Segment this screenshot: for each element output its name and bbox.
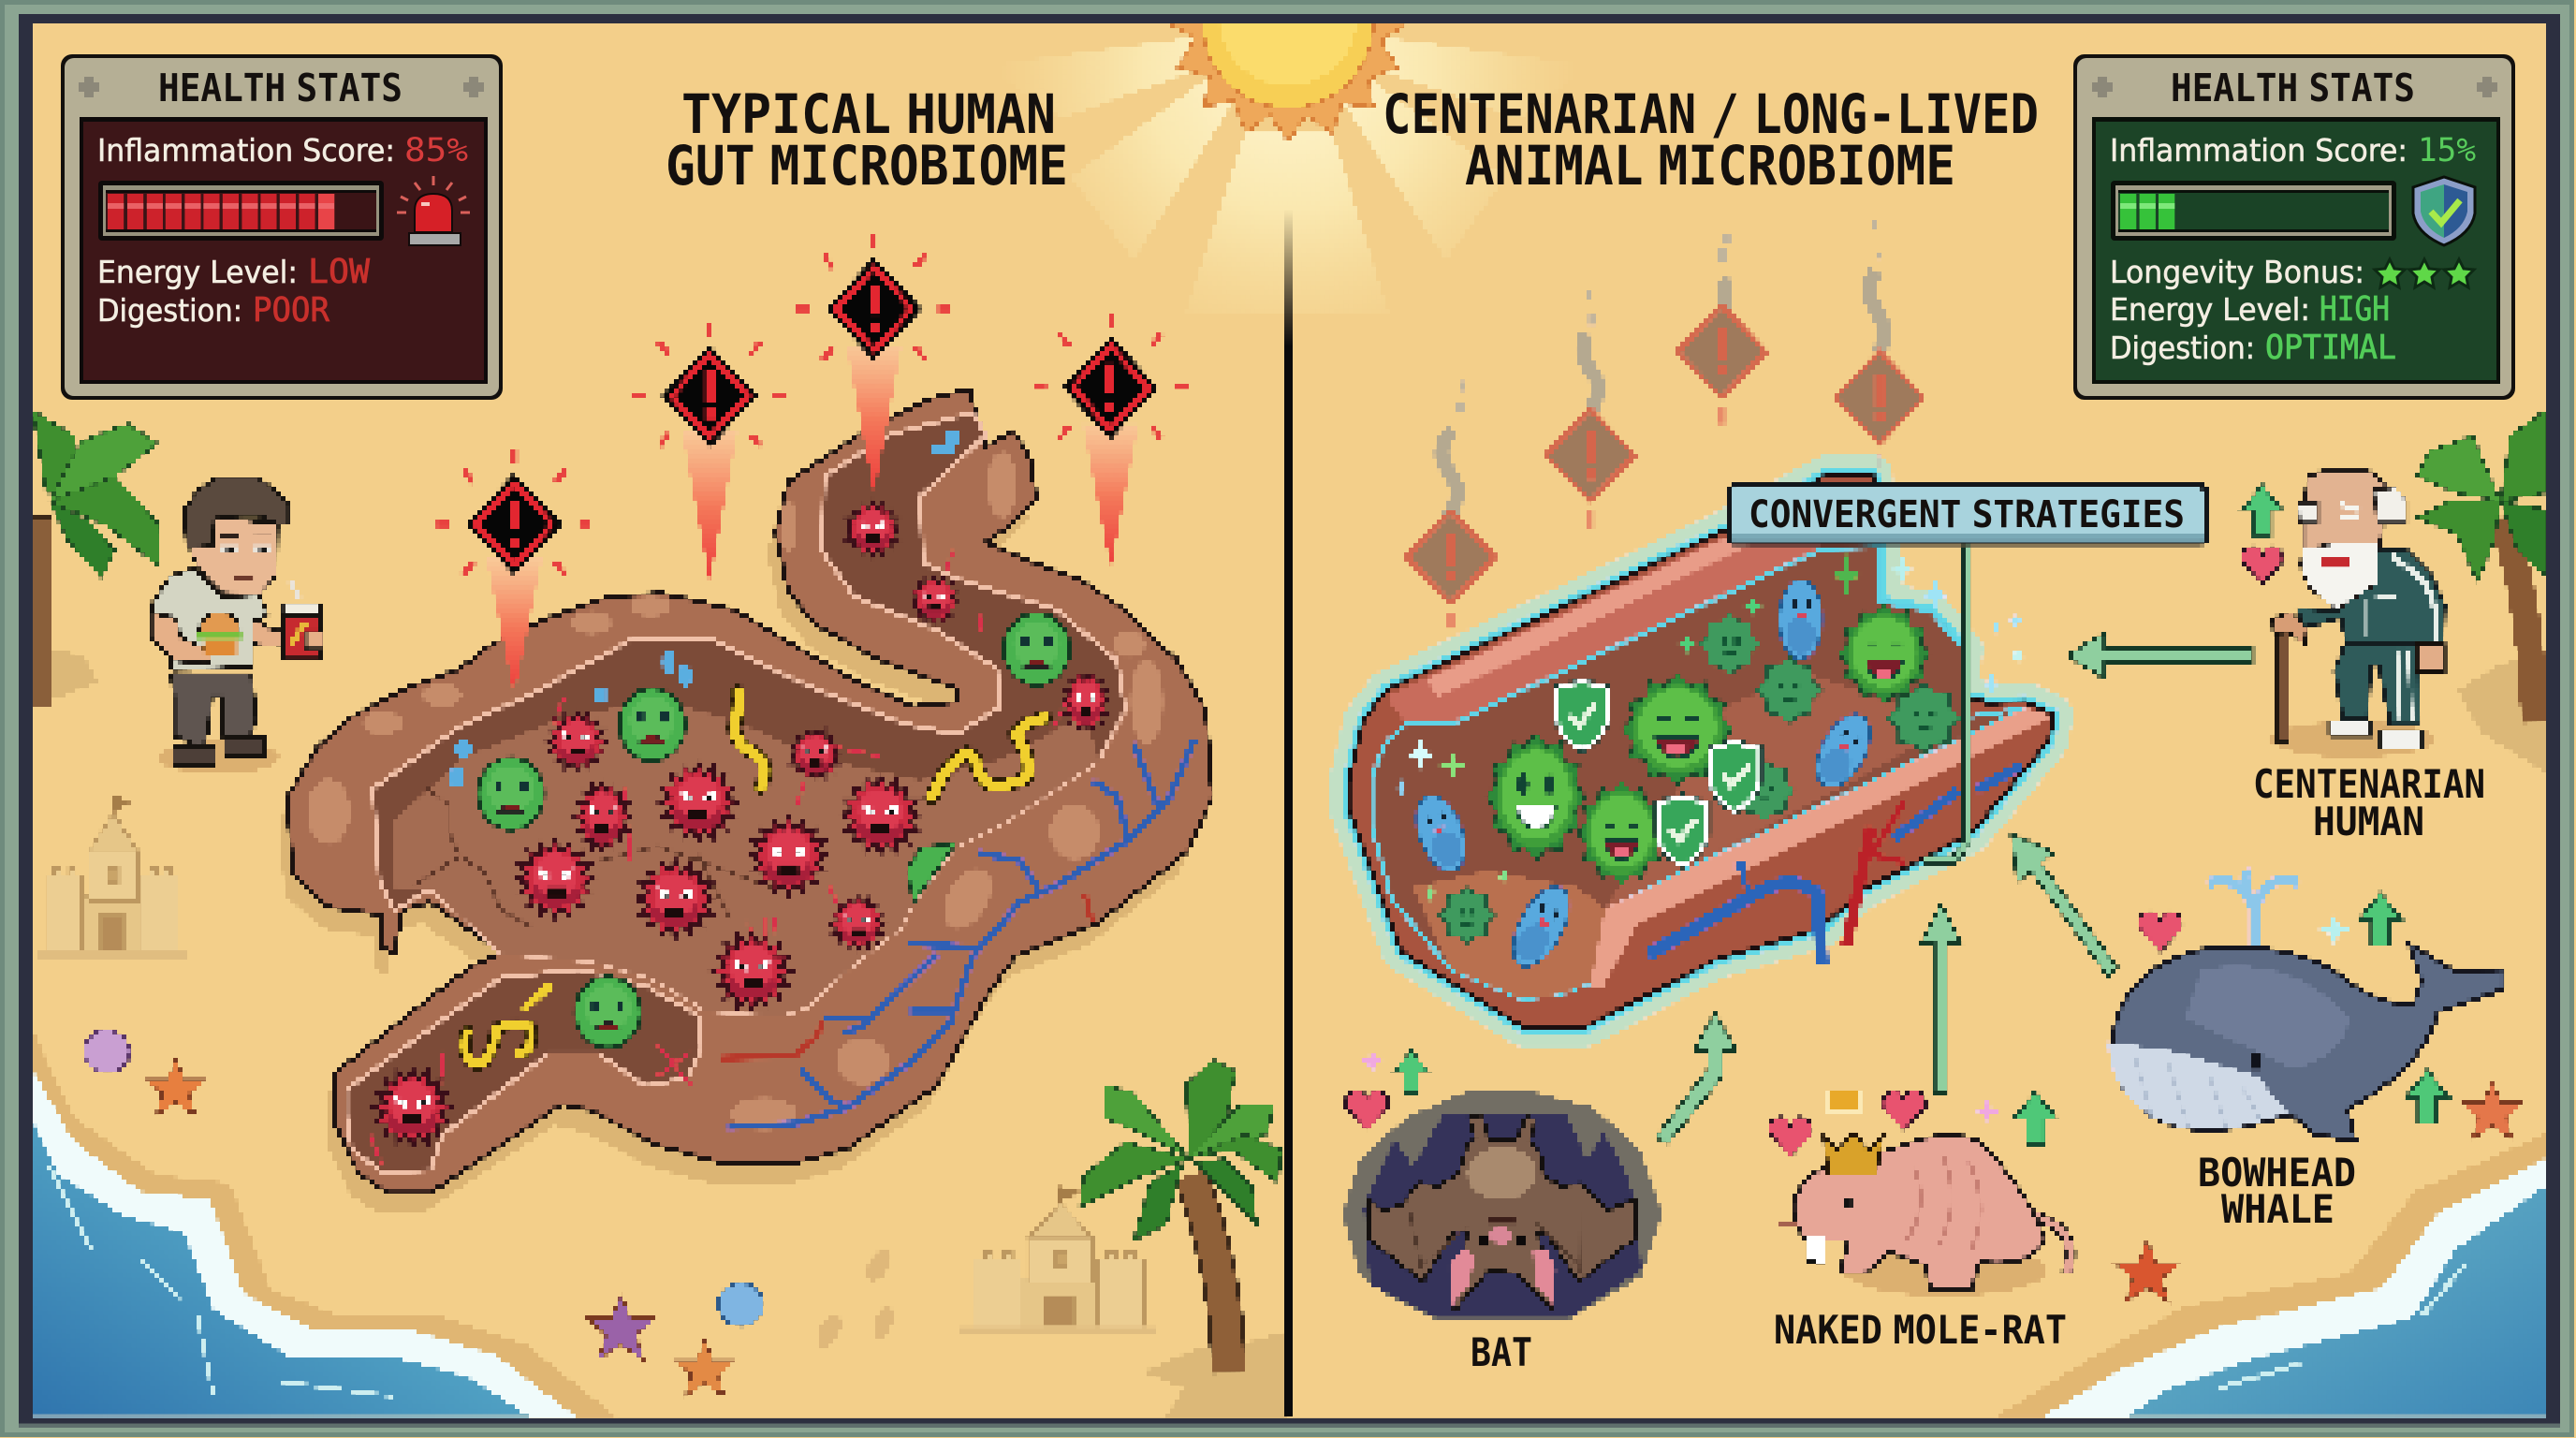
figure: bat in cave (1342, 1091, 1662, 1319)
label box: convergent strategies (1727, 483, 2208, 546)
title: long-lived: CENTENARIAN / LONG-LIVED (1383, 82, 2039, 146)
rivets (79, 77, 484, 97)
title: long-lived (1383, 82, 2039, 198)
shields (1555, 679, 1763, 868)
panel: health stats (long-lived) (2073, 54, 2515, 400)
panel title: HEALTH STATS (158, 66, 402, 110)
icons around whale (2139, 893, 2449, 1123)
label: bowhead whale: BOWHEAD (2198, 1150, 2356, 1196)
arrow: bat to gut (1656, 1012, 1736, 1144)
red veins (720, 892, 1092, 1058)
energy and digestion: Energy Level: (2110, 291, 2310, 328)
sun rays (1044, 37, 1530, 309)
icon: shield (2413, 177, 2475, 245)
label: bat: BAT (1471, 1329, 1532, 1375)
ocean: left (31, 1027, 616, 1416)
rivets (2092, 77, 2497, 97)
label: bowhead whale: WHALE (2221, 1186, 2334, 1232)
crown on mole-rat (1823, 1132, 1882, 1175)
warning beams (487, 345, 1138, 694)
energy and digestion: OPTIMAL (2265, 329, 2396, 367)
palm tree: bottom (1079, 1060, 1288, 1416)
warning diamonds (437, 235, 1188, 575)
label: centenarian human: HUMAN (2313, 799, 2424, 844)
inflammation bar (98, 181, 384, 241)
icons around bat (1345, 1049, 1429, 1131)
footprints (819, 1250, 894, 1348)
gut wall patches (307, 452, 1164, 1131)
screen (80, 117, 488, 384)
gut: typical human (inflamed) (279, 389, 1212, 1214)
inflammation bar (2111, 181, 2396, 241)
figure: bowhead whale (2108, 873, 2504, 1142)
title: typical (666, 82, 1068, 198)
inflammation line: Inflammation Score: (2110, 132, 2408, 169)
label: naked mole-rat: NAKED MOLE-RAT (1774, 1307, 2067, 1353)
icon: up arrow and heart for human (2242, 485, 2283, 584)
tube lumen (1372, 547, 2026, 999)
tube glow (1349, 475, 2054, 1027)
gut chamber floor (394, 698, 1099, 1016)
label: centenarian human: CENTENARIAN (2253, 761, 2485, 807)
gut: long-lived healthy (1349, 475, 2054, 1027)
gut shadow (281, 506, 1189, 1212)
figure: naked mole-rat (1775, 1136, 2071, 1297)
shells and starfish (84, 1030, 2524, 1397)
gut lumen (373, 413, 1125, 1016)
connector (1924, 546, 1968, 859)
title: typical: GUT MICROBIOME (666, 134, 1068, 198)
longevity bonus: Longevity Bonus: (2110, 254, 2364, 290)
label: bowhead whale (2198, 1150, 2356, 1232)
inflammation line: 85% (404, 132, 468, 169)
tube top edge (1386, 487, 1827, 725)
water drops (448, 431, 958, 787)
sad green bacteria (478, 613, 1070, 1048)
icon: alarm siren (397, 176, 470, 245)
tube floor (1412, 871, 1605, 999)
energy and digestion (97, 253, 370, 330)
gut wall (287, 389, 1212, 1193)
screen (2092, 117, 2500, 384)
green healthy microbes (1486, 605, 1930, 885)
smoke (1442, 271, 1883, 518)
energy and digestion: LOW (308, 253, 370, 291)
energy and digestion: POOR (253, 291, 329, 330)
inflammatory bacteria (373, 501, 1109, 1147)
defused warnings (1406, 305, 1924, 629)
yellow worms (465, 692, 1045, 1064)
lower tube lumen (346, 970, 701, 1173)
teal microbes (1440, 614, 1961, 943)
palm tree: top right (2417, 411, 2545, 772)
energy and digestion (2110, 290, 2396, 367)
label: centenarian human (2253, 761, 2485, 844)
panel title: HEALTH STATS (2171, 66, 2415, 110)
palm tree: top left (31, 411, 159, 707)
sparkles (1394, 554, 2028, 903)
arrow: whale to gut (2011, 833, 2117, 976)
figure: typical human (151, 478, 322, 774)
energy and digestion: Energy Level: (97, 254, 298, 290)
inflammation line: 15% (2418, 132, 2476, 169)
arrow: human to gut (2067, 633, 2252, 679)
energy and digestion: Digestion: (97, 292, 242, 329)
divider (1284, 209, 1293, 1416)
sandcastle left (37, 795, 187, 958)
ocean: right (1996, 1134, 2545, 1416)
title: typical: TYPICAL HUMAN (681, 82, 1056, 146)
chamber folds (411, 785, 772, 927)
energy and digestion: Digestion: (2110, 330, 2255, 366)
inflammation streaks (370, 550, 1068, 1164)
energy and digestion: HIGH (2320, 290, 2390, 329)
inflammation line: Inflammation Score: (97, 132, 395, 169)
tube lining (1590, 708, 2052, 990)
figure: centenarian human (2271, 470, 2445, 757)
sandcastle right (961, 1186, 1156, 1334)
label: convergent strategies: CONVERGENT STRATEGIES (1749, 493, 2185, 536)
sun (1170, 23, 1404, 140)
title: long-lived: ANIMAL MICROBIOME (1465, 134, 1955, 198)
tube vessels (1647, 766, 2021, 962)
panel: health stats (typical) (61, 54, 503, 400)
arrow: mole-rat to gut (1921, 903, 1962, 1093)
blue microbes (1407, 580, 1881, 975)
icons around mole-rat (1769, 1091, 2057, 1157)
blue vessels (728, 740, 1194, 1127)
tube wall (1349, 475, 2054, 1027)
